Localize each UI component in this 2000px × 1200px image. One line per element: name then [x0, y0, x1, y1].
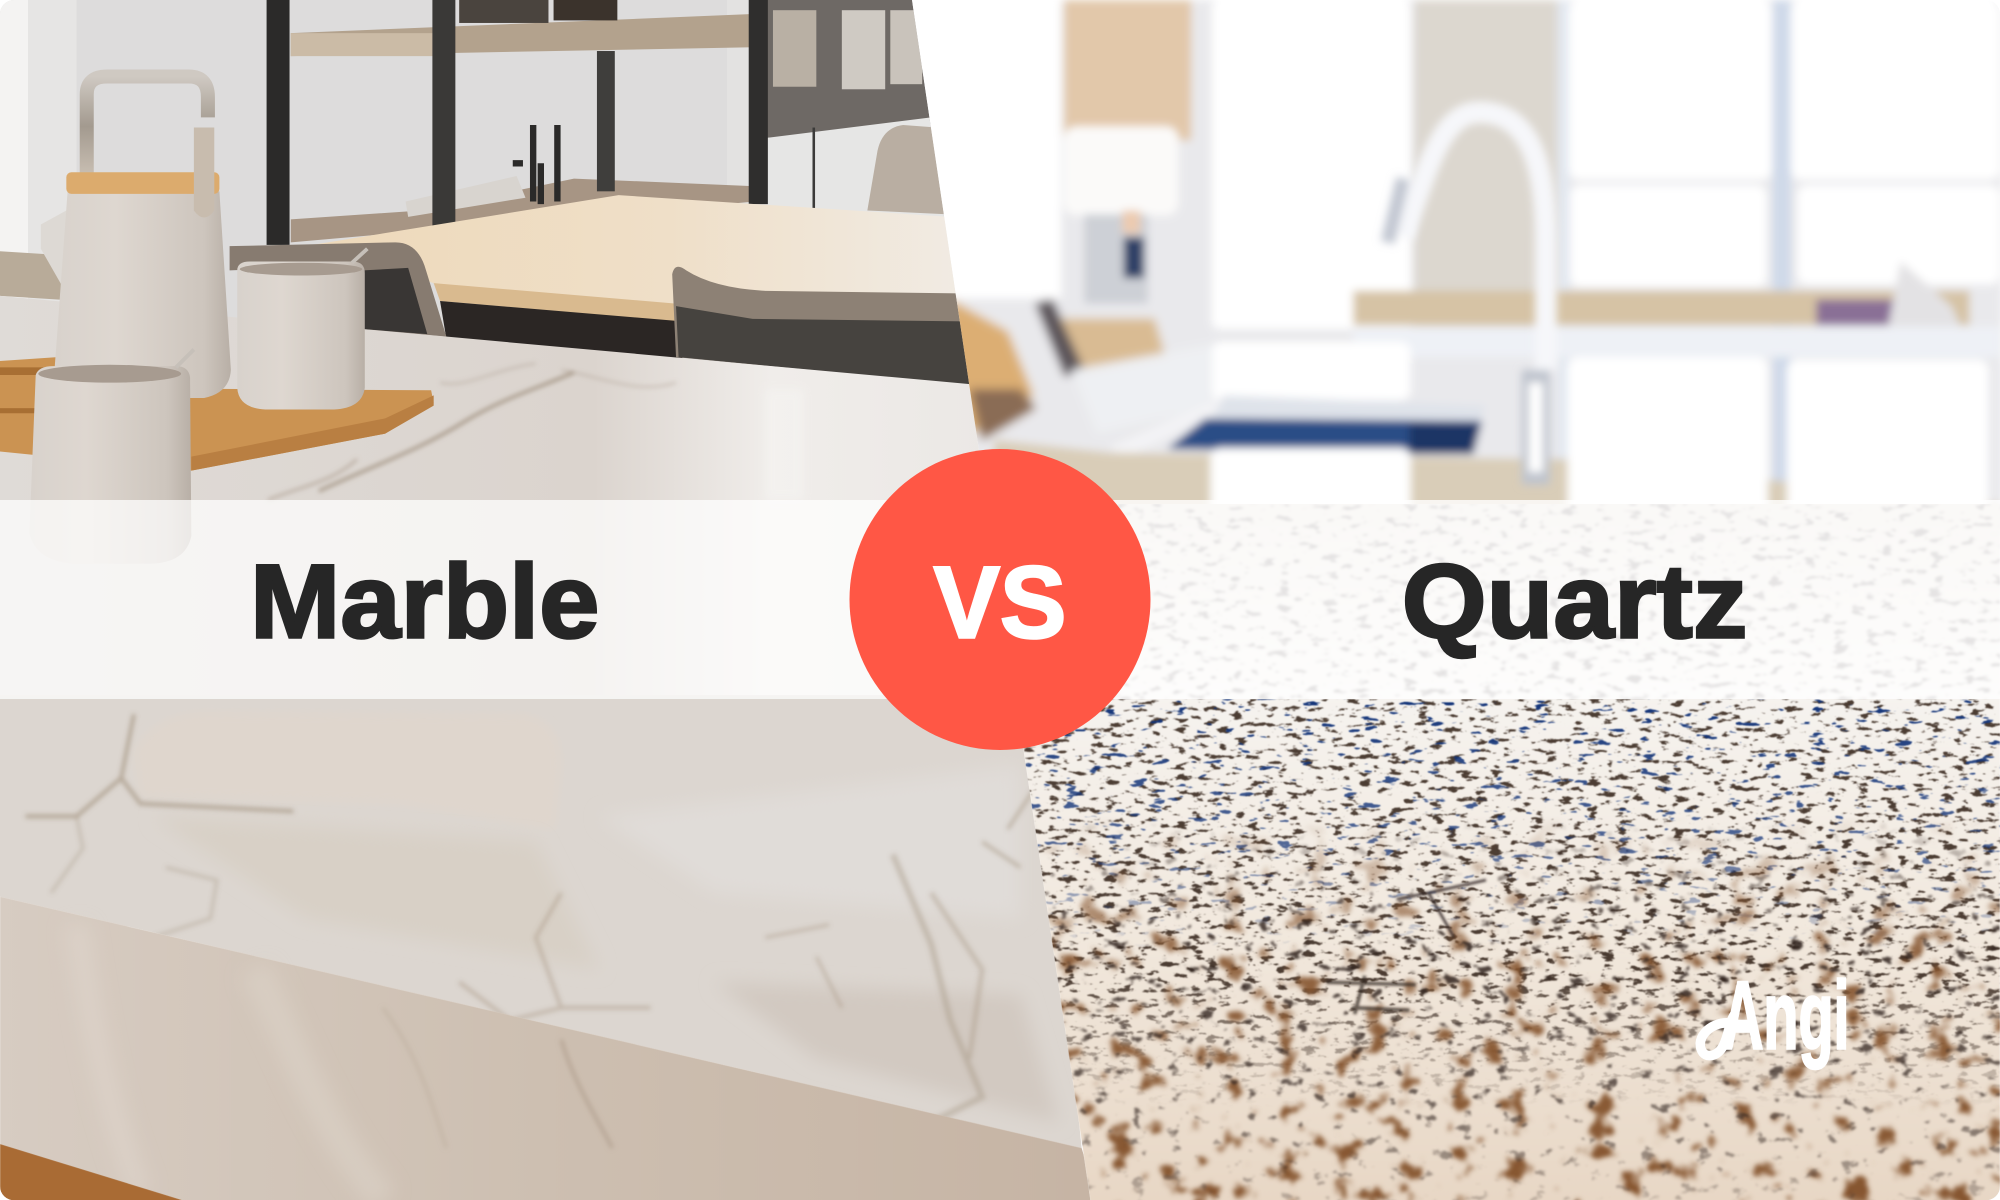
sofa — [956, 294, 1168, 444]
band: marble label strip — [0, 500, 1000, 699]
shelf — [267, 0, 768, 245]
jug — [41, 128, 231, 398]
granite countertop — [995, 504, 2000, 1200]
heading: Marble: Marble — [250, 544, 599, 661]
VS badge — [849, 449, 1151, 750]
window — [765, 0, 944, 217]
marble countertop upper — [0, 296, 989, 714]
wall — [0, 0, 969, 383]
faucet — [1388, 112, 1546, 485]
VS badge: VS — [934, 546, 1066, 660]
wood base — [0, 1144, 182, 1200]
dining table — [312, 195, 959, 360]
panel: marble photo — [0, 0, 1097, 1200]
left chair — [0, 242, 446, 337]
right chair — [672, 267, 969, 385]
panel: quartz photo — [906, 0, 2000, 1200]
counter back — [990, 437, 1790, 504]
marble front edge — [0, 897, 1097, 1200]
heading: Quartz: Quartz — [1402, 544, 1747, 661]
mug front — [29, 349, 194, 564]
band: quartz label strip — [1000, 500, 2000, 699]
wooden tray — [0, 357, 434, 471]
back chair — [867, 125, 946, 214]
mug middle — [237, 249, 367, 409]
jug handle back — [87, 77, 208, 176]
logo: Angi — [1700, 960, 1849, 1069]
marble surface lower — [0, 695, 1082, 1148]
blurred kitchen background — [906, 0, 2000, 540]
logo: Angi: Angi — [1722, 960, 1849, 1069]
sink — [1110, 395, 1486, 459]
